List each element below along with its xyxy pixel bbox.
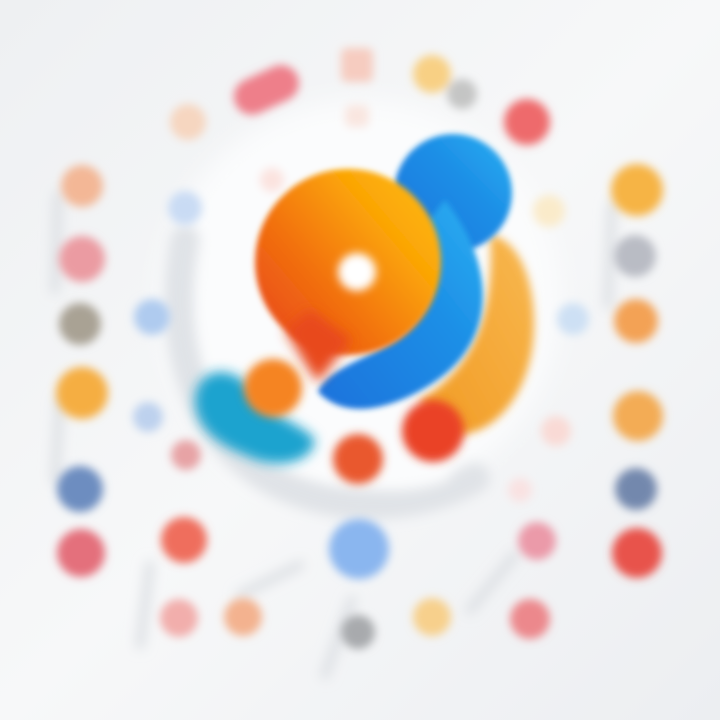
inner small icons [133, 168, 589, 502]
central graphic: overlapping orange and blue shapes [195, 134, 534, 484]
left icon column [56, 165, 108, 577]
lower icons [160, 517, 556, 649]
top icon row [170, 48, 550, 145]
connector lines [55, 195, 612, 675]
small orange circle [244, 359, 302, 417]
orange main circle [255, 169, 441, 355]
central pale disc [160, 100, 560, 500]
white centre [338, 253, 376, 291]
orange tail [285, 310, 352, 382]
red-orange circle [333, 434, 383, 484]
blue upper circle [394, 134, 512, 252]
teal blob [195, 372, 315, 463]
light orange crescent [420, 235, 534, 435]
right icon column [611, 164, 663, 578]
grey arc around the central graphic [179, 240, 475, 504]
red circle on band [402, 400, 464, 462]
blue curved band [318, 200, 483, 409]
